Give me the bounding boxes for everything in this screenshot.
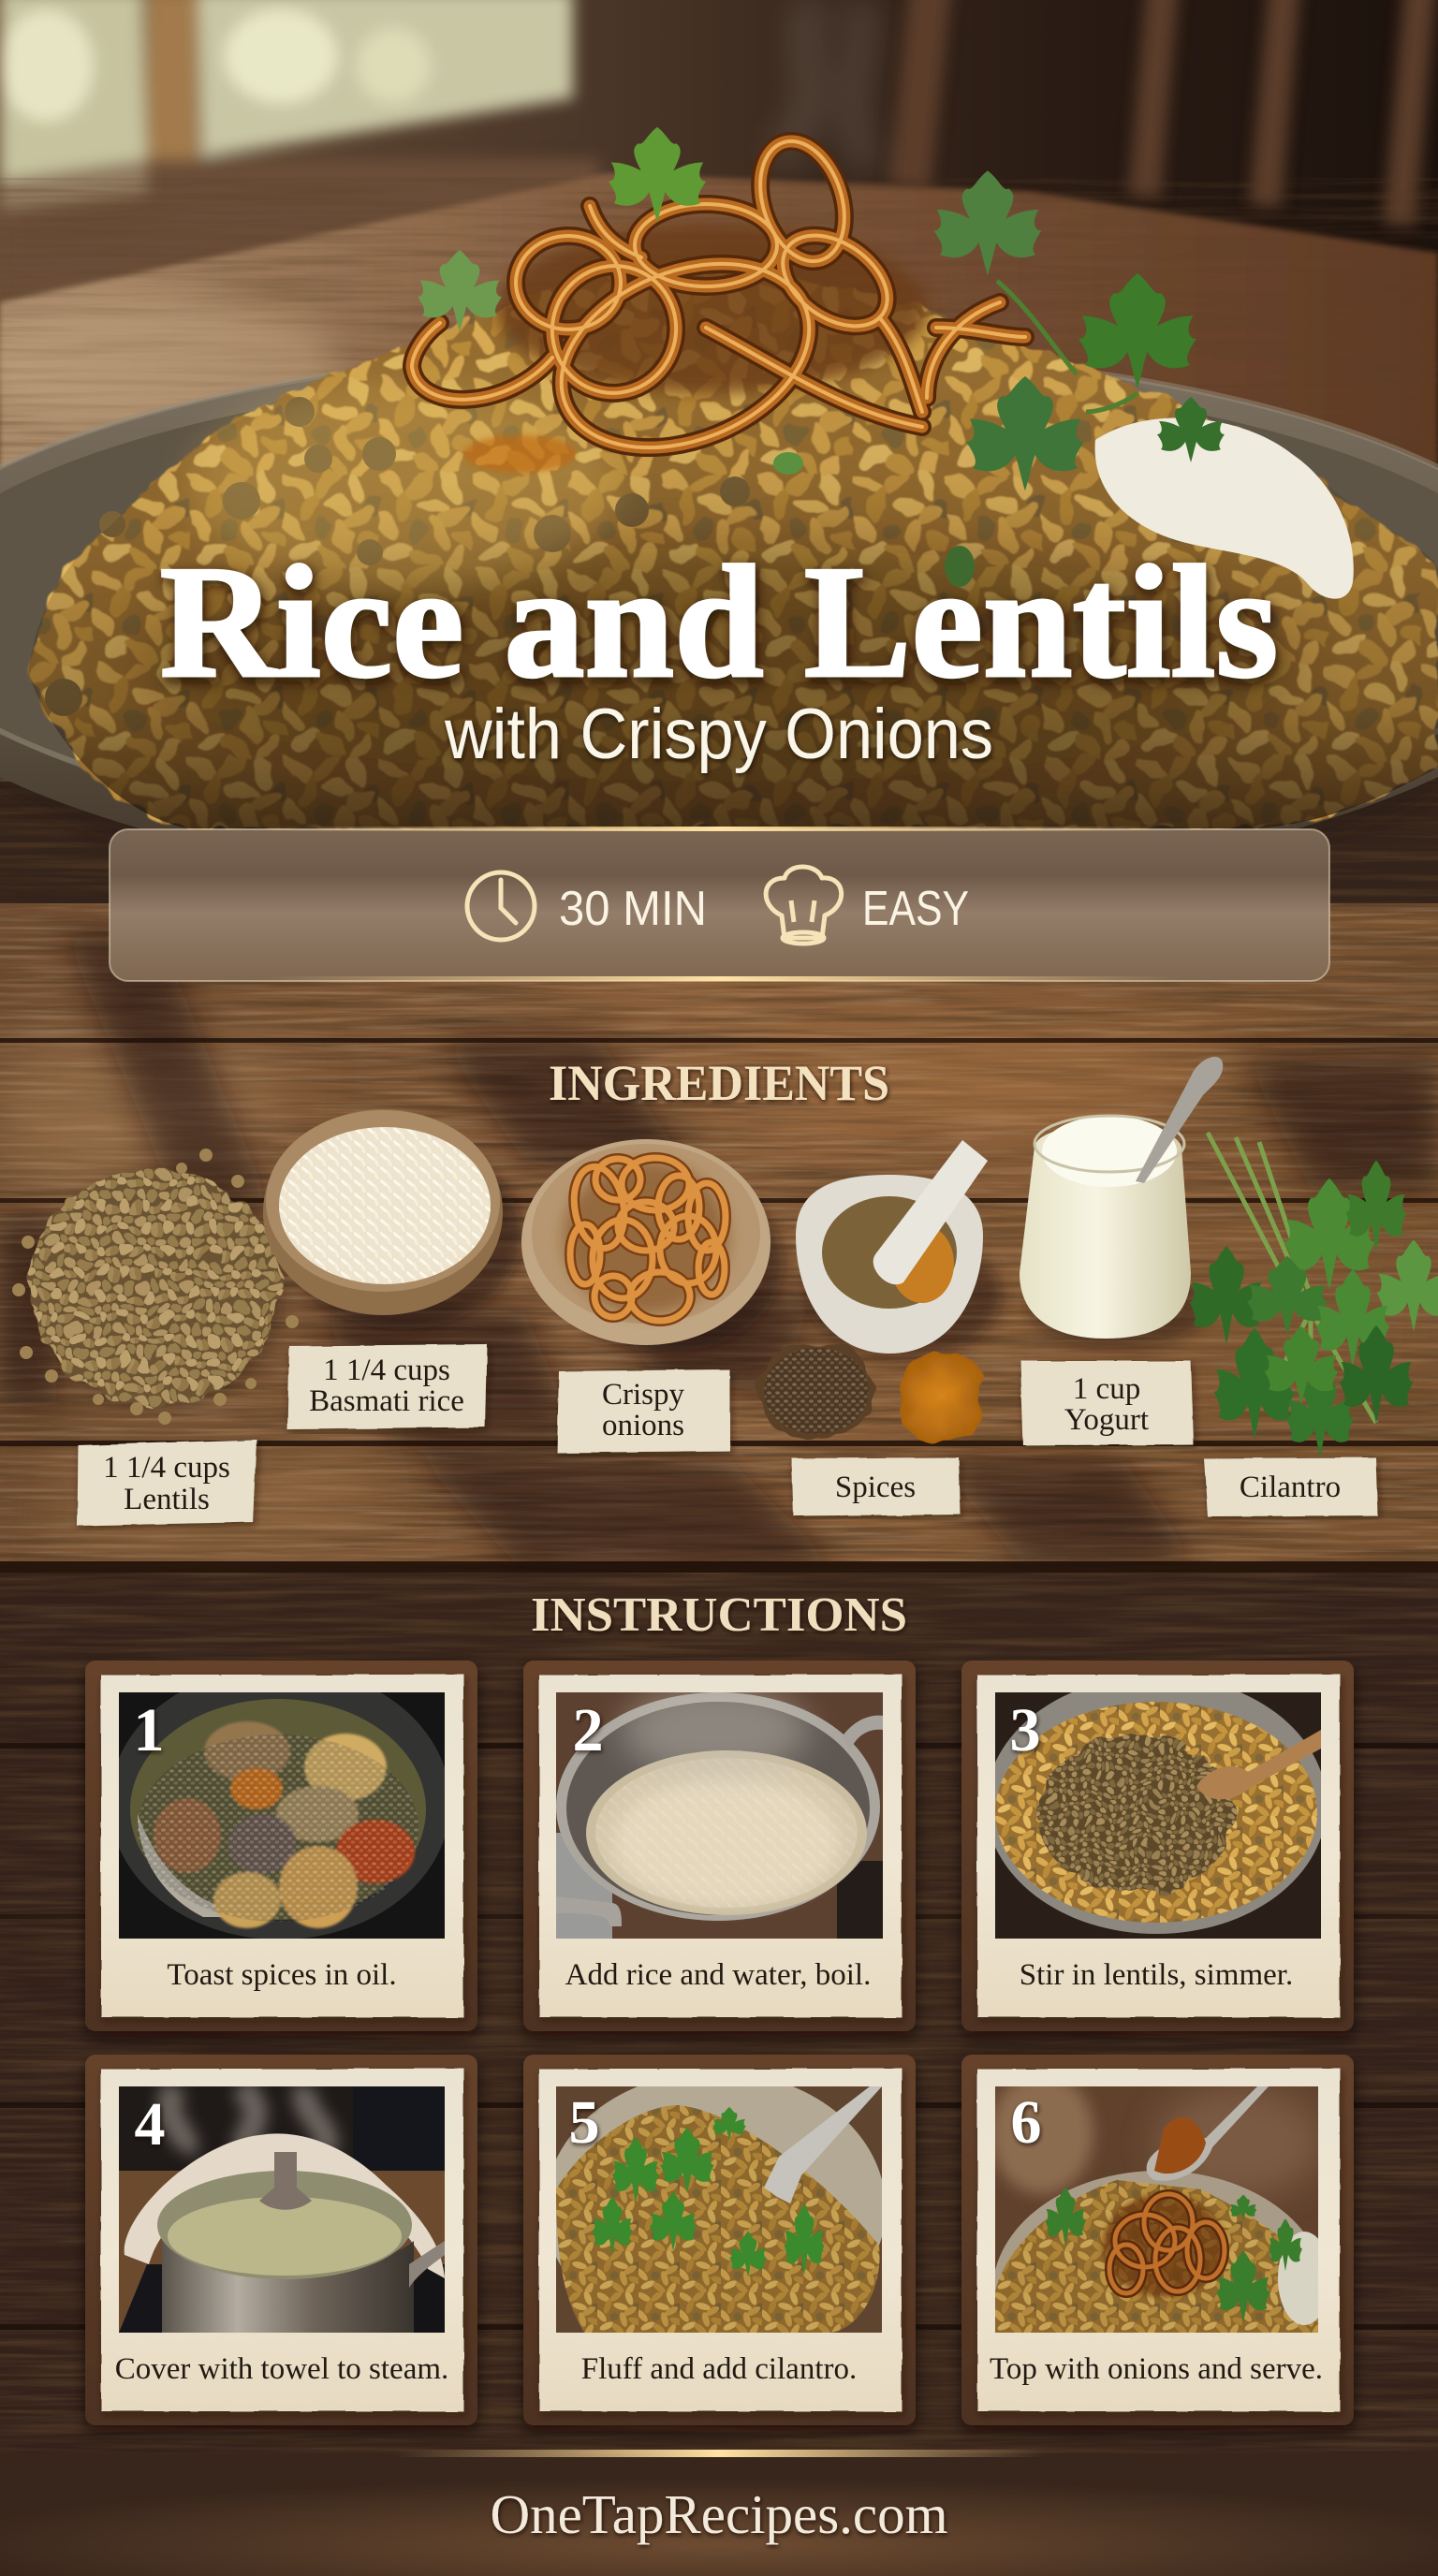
step 2 photo: rice boiling in pot: 2: [573, 1696, 603, 1764]
ingredient: turmeric powder: [897, 1350, 983, 1443]
step 1 photo: toasting spices in a pan: [119, 1692, 445, 1939]
step 3 photo: stirring lentils into rice: [995, 1692, 1321, 1939]
step 2 photo: rice boiling in pot: [556, 1692, 883, 1939]
icon: clock: [467, 872, 535, 940]
ingredient label: yogurt: 1 cup: [1073, 1372, 1140, 1406]
step card 3: [961, 1661, 1354, 2031]
step 4 photo: pot covered with towel: 4: [135, 2090, 165, 2159]
ingredient: mortar and pestle with spices: [796, 1140, 1002, 1357]
wooden table behind plate: [0, 173, 1438, 904]
ingredient label: lentils: Lentils: [124, 1483, 210, 1516]
heading: ingredients: INGREDIENTS: [549, 1055, 889, 1111]
step 2 caption: Add rice and water, boil.: [565, 1958, 871, 1992]
ingredient label: spices: Spices: [835, 1471, 916, 1504]
icon: chef hat: [766, 867, 842, 944]
step card 2: [523, 1661, 916, 2031]
ingredient: basmati rice bowl: [263, 1109, 522, 1329]
fried onion rings: [412, 130, 1025, 482]
step 1 photo: toasting spices in a pan: 1: [133, 1696, 165, 1764]
title: Rice and Lentils: [160, 534, 1278, 711]
ingredient label: yogurt: Yogurt: [1064, 1403, 1149, 1437]
step 3 photo: stirring lentils into rice: 3: [1009, 1696, 1041, 1764]
hero photo: plated rice and lentils: [0, 0, 1438, 914]
plate: [0, 345, 1438, 914]
subtitle: with Crispy Onions: [444, 695, 993, 774]
step 6 caption: Top with onions and serve.: [990, 2352, 1323, 2386]
yogurt dollop: [1095, 417, 1354, 599]
panel: ingredients: [0, 903, 1438, 1574]
step 6 photo: topping rice with onions: 6: [1011, 2088, 1041, 2157]
ingredient label: crispy onions: onions: [602, 1409, 684, 1442]
chair back spokes: [889, 0, 1436, 227]
ingredient label: cilantro: [1204, 1457, 1378, 1516]
step card 1: [85, 1661, 477, 2031]
step card 6: [961, 2055, 1354, 2425]
step card 4: [85, 2055, 477, 2425]
cilantro garnish: [418, 127, 1225, 587]
ingredient label: basmati rice: [287, 1344, 487, 1429]
ingredient label: basmati rice: Basmati rice: [309, 1384, 464, 1418]
window panes: [0, 0, 599, 328]
step 4 caption: Cover with towel to steam.: [115, 2352, 448, 2386]
ingredient label: spices: [791, 1457, 961, 1516]
ingredient label: lentils: [77, 1440, 257, 1526]
footer: [0, 2450, 1438, 2576]
ingredient: lentils: [12, 1149, 299, 1425]
step 4 photo: pot covered with towel: [119, 2086, 445, 2333]
website: OneTapRecipes.com: [491, 2483, 947, 2545]
cook time: 30 MIN: [559, 882, 707, 936]
ingredient: yogurt jar: [1020, 1057, 1223, 1348]
plank seams: [0, 1038, 1438, 1574]
ingredient: crispy onions bowl: [521, 1139, 784, 1353]
ingredient label: crispy onions: [557, 1369, 730, 1453]
ingredient label: cilantro: Cilantro: [1240, 1471, 1341, 1504]
step 5 photo: fluffed rice with cilantro and fork: [556, 2086, 882, 2333]
ingredient: whole spices pile: [758, 1342, 874, 1440]
panel: instructions: [0, 1573, 1438, 2454]
ingredient label: crispy onions: Crispy: [602, 1378, 685, 1412]
step 6 photo: topping rice with onions: [995, 2086, 1318, 2333]
ingredient label: yogurt: [1020, 1361, 1194, 1445]
ingredient label: lentils: 1 1/4 cups: [103, 1451, 230, 1485]
rice mound: [28, 271, 1438, 828]
heading: instructions: INSTRUCTIONS: [531, 1588, 907, 1642]
step 3 caption: Stir in lentils, simmer.: [1020, 1958, 1293, 1992]
step card 5: [523, 2055, 916, 2425]
glass info bar: [110, 827, 1329, 981]
steam: [777, 0, 871, 168]
step 5 photo: fluffed rice with cilantro and fork: 5: [569, 2088, 599, 2157]
difficulty: EASY: [862, 882, 969, 936]
step 1 caption: Toast spices in oil.: [167, 1958, 397, 1992]
step 5 caption: Fluff and add cilantro.: [581, 2352, 857, 2386]
ingredient label: basmati rice: 1 1/4 cups: [323, 1354, 450, 1387]
ingredient: cilantro bunch: [1189, 1133, 1438, 1458]
